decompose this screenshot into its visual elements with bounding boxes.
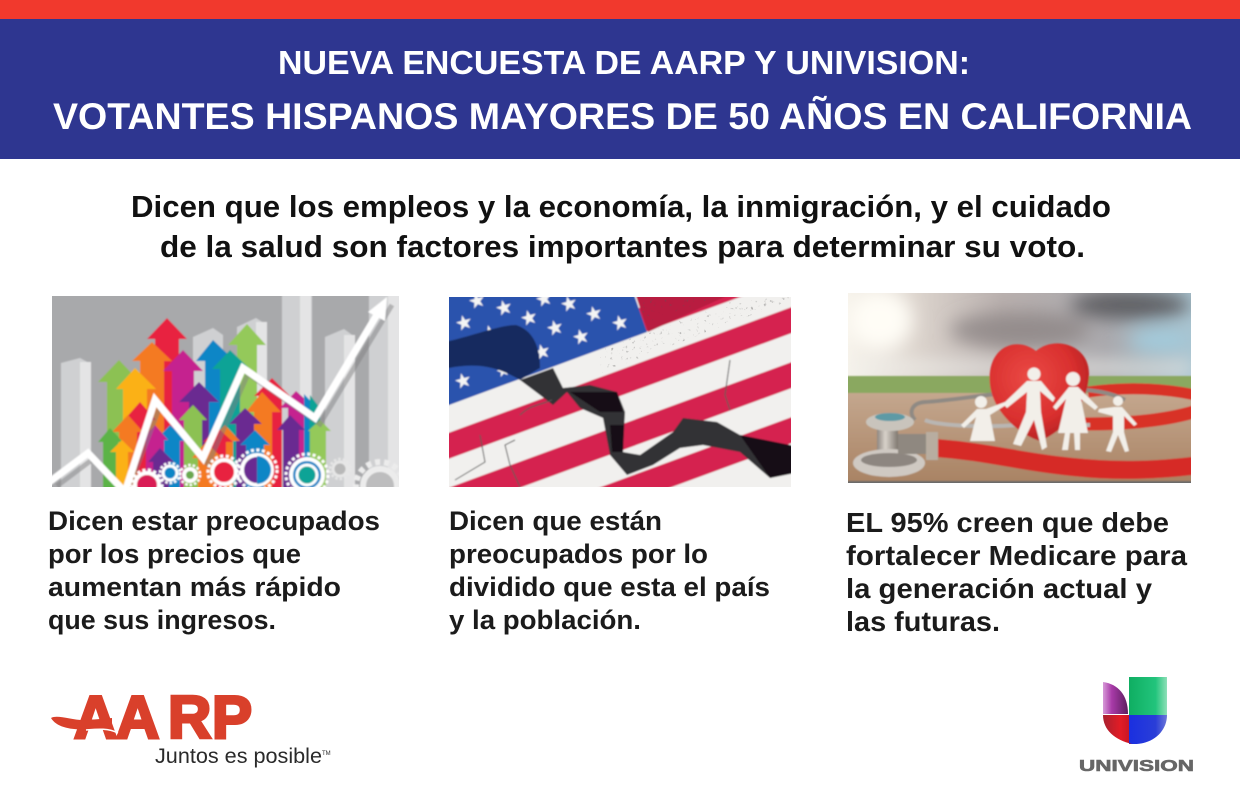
subtitle — [131, 189, 1111, 264]
subtitle: Dicen que los empleos y la economía, la inmigración, y el cuidado — [131, 189, 1111, 224]
image: cracked American flag — [449, 297, 791, 487]
caption: immigration — [449, 506, 770, 635]
caption: health: fortalecer Medicare para — [846, 540, 1187, 571]
caption: economy — [48, 506, 380, 635]
logo: AARP: Juntos es posible — [155, 745, 322, 768]
caption: immigration: Dicen que están — [449, 506, 662, 536]
logo: AARP: AARP — [74, 684, 252, 751]
caption: health: la generación actual y — [846, 573, 1152, 604]
title line 1: NUEVA ENCUESTA DE AARP Y UNIVISION: — [278, 44, 970, 81]
caption: immigration: dividido que esta el país — [449, 572, 770, 602]
panel: economy — [44, 288, 407, 635]
caption: economy: que sus ingresos. — [48, 605, 276, 635]
header banner — [0, 19, 1240, 159]
caption: economy: Dicen estar preocupados — [48, 506, 380, 536]
caption: health — [846, 507, 1187, 637]
title line 2: VOTANTES HISPANOS MAYORES DE 50 AÑOS EN CALIFORNIA — [53, 95, 1192, 137]
caption: immigration: preocupados por lo — [449, 539, 708, 569]
logo: AARP — [51, 684, 331, 768]
caption: immigration: y la población. — [449, 605, 641, 635]
logo: Univision — [1079, 677, 1194, 775]
logo: AARP: TM — [322, 751, 331, 757]
top red bar — [0, 0, 1240, 19]
image: heart, stethoscope and paper family — [840, 290, 1200, 491]
panel: immigration — [449, 297, 791, 634]
caption: economy: aumentan más rápido — [48, 572, 341, 602]
image: colourful rising arrows chart — [52, 296, 399, 487]
subtitle: de la salud son factores importantes para determinar su voto. — [160, 229, 1085, 264]
logo: Univision: UNIVISION — [1079, 758, 1194, 775]
caption: health: las futuras. — [846, 606, 1000, 637]
caption: economy: por los precios que — [48, 539, 301, 569]
caption: health: EL 95% creen que debe — [846, 507, 1169, 538]
panel: health — [840, 290, 1200, 637]
